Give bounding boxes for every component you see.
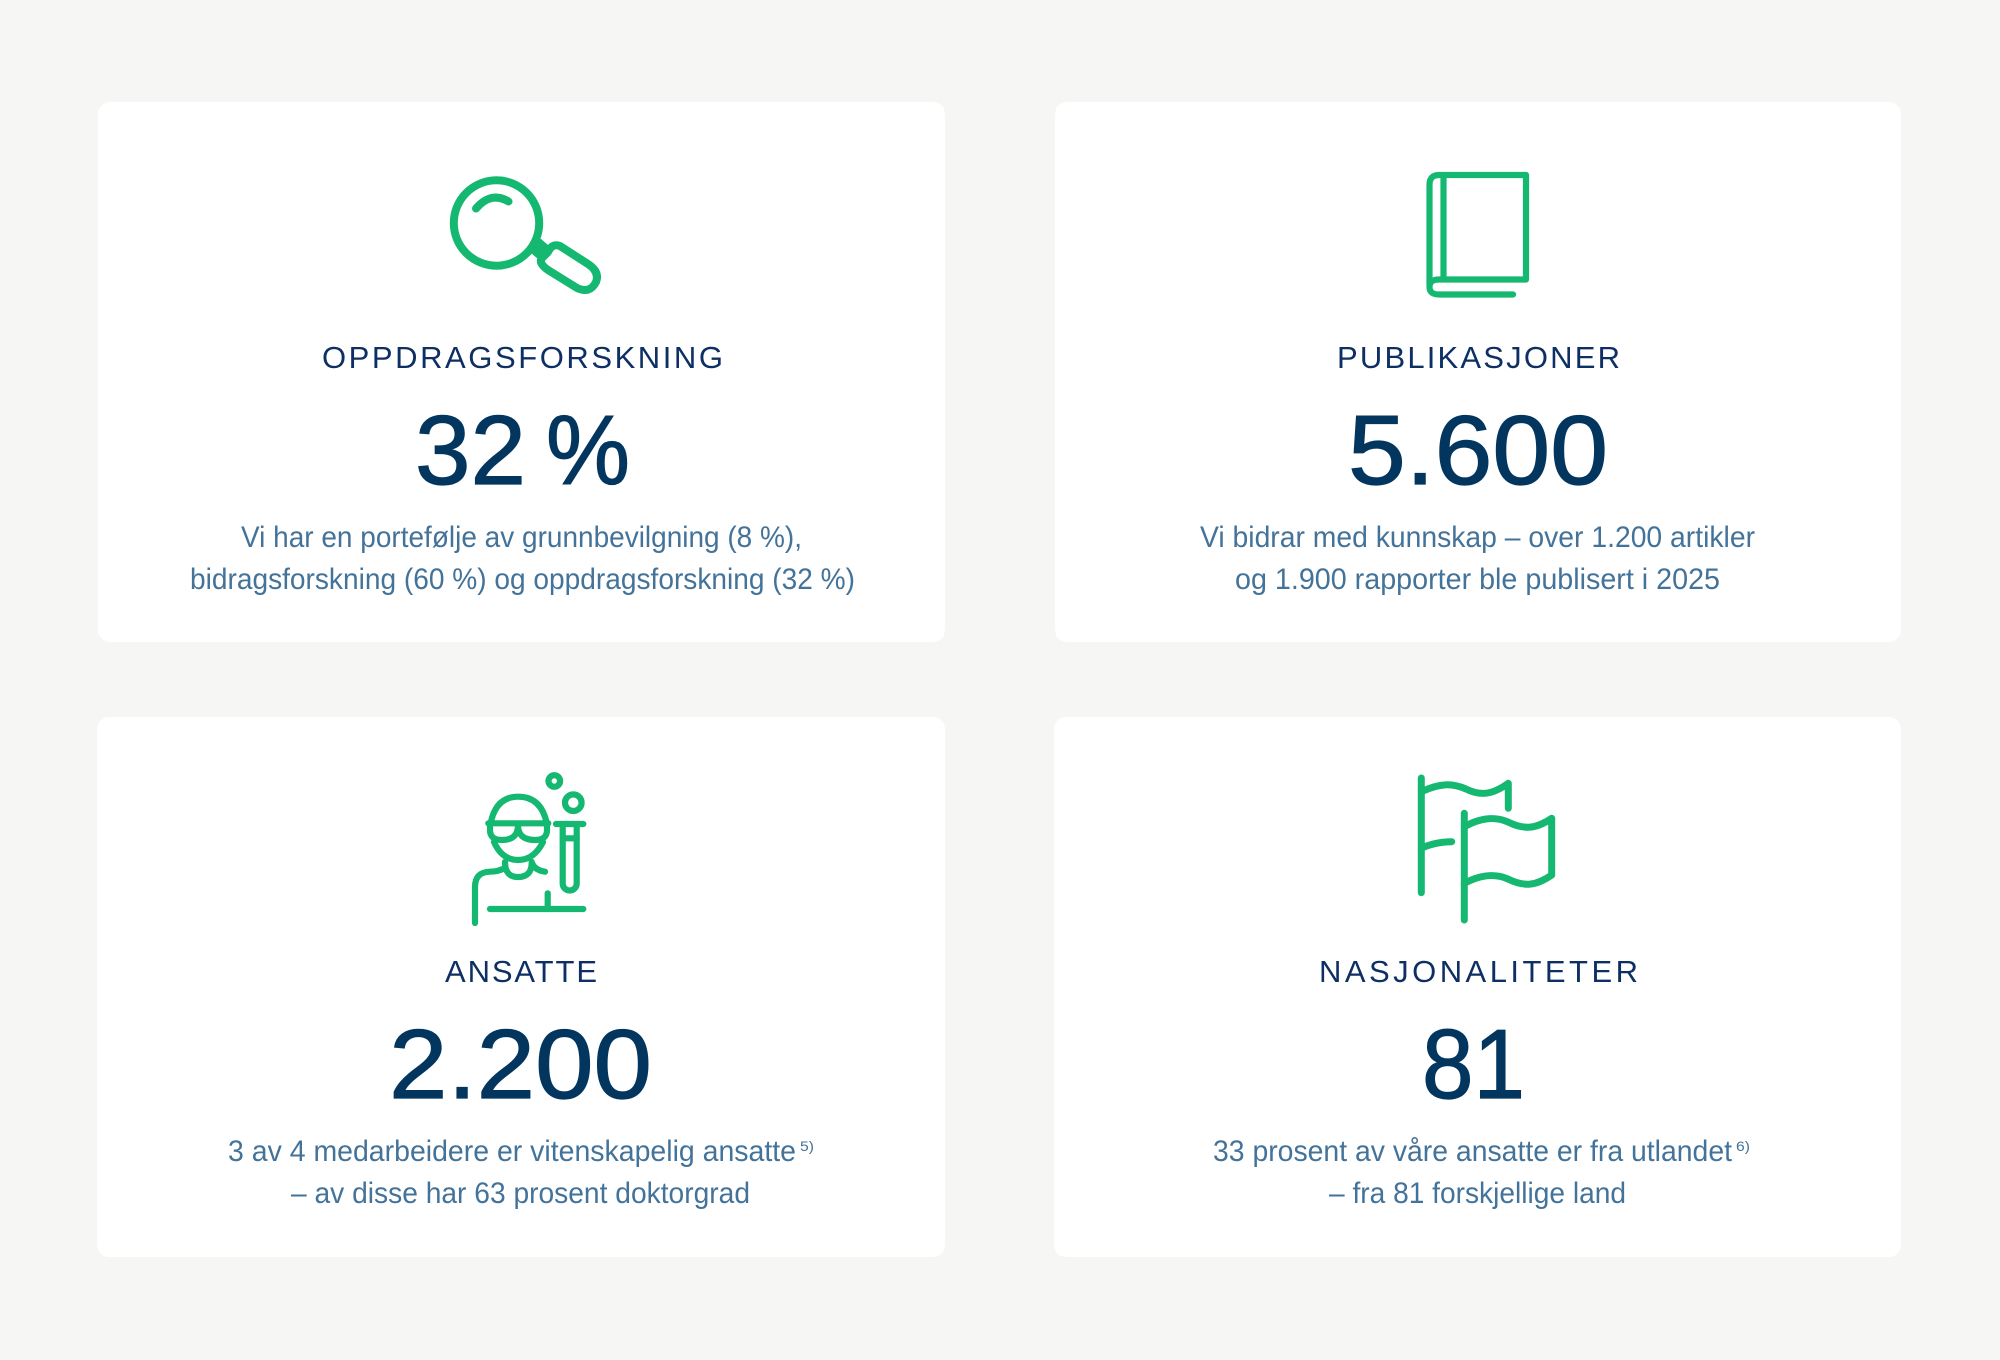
text block: publications description (1200, 521, 1755, 596)
heading: oppdragsforskning: OPPDRAGSFORSKNING (322, 340, 723, 375)
icon: book (1430, 175, 1526, 294)
text block: publications description: Vi bidrar med kunnskap – over 1.200 artikler (1200, 521, 1755, 554)
number: 2.200: 2.200 (389, 1009, 652, 1119)
panel: publikasjoner (1055, 102, 1901, 642)
panel: nasjonaliteter (1054, 717, 1901, 1257)
text block: nationalities description (1213, 1135, 1750, 1210)
icon: scientist with test tube (475, 775, 583, 923)
number: 32 % (415, 395, 630, 505)
text block: nationalities description: 33 prosent av våre ansatte er fra utlandet (1213, 1135, 1733, 1168)
heading: ansatte: ANSATTE (445, 954, 597, 989)
text block: employees description: 3 av 4 medarbeidere er vitenskapelig ansatte (228, 1135, 796, 1168)
heading: nasjonaliteter: NASJONALITETER (1319, 954, 1638, 989)
icon: magnifying glass (454, 180, 597, 290)
panel: ansatte (97, 717, 945, 1257)
text block: employees description: 5) (800, 1138, 814, 1154)
text block: employees description (228, 1135, 814, 1210)
text block: publications description: og 1.900 rapporter ble publisert i 2025 (1235, 563, 1720, 596)
text block: portfolio description: Vi har en portefølje av grunnbevilgning (8 %), (241, 521, 802, 554)
heading: publikasjoner: PUBLIKASJONER (1337, 340, 1620, 375)
number: 32 %: % (546, 395, 630, 505)
text block: employees description: – av disse har 63 prosent doktorgrad (291, 1177, 750, 1210)
icon: two flags (1421, 778, 1552, 920)
panel: oppdragsforskning (98, 102, 945, 642)
text block: nationalities description: – fra 81 forskjellige land (1329, 1177, 1626, 1210)
text block: nationalities description: 6) (1736, 1138, 1750, 1154)
text block: portfolio description: bidragsforskning (60 %) og oppdragsforskning (32 %) (190, 563, 855, 596)
text block: portfolio description (190, 521, 855, 596)
number: 81: 81 (1422, 1009, 1525, 1119)
number: 32 %: 32 (415, 395, 526, 505)
number: 5.600: 5.600 (1348, 395, 1608, 505)
